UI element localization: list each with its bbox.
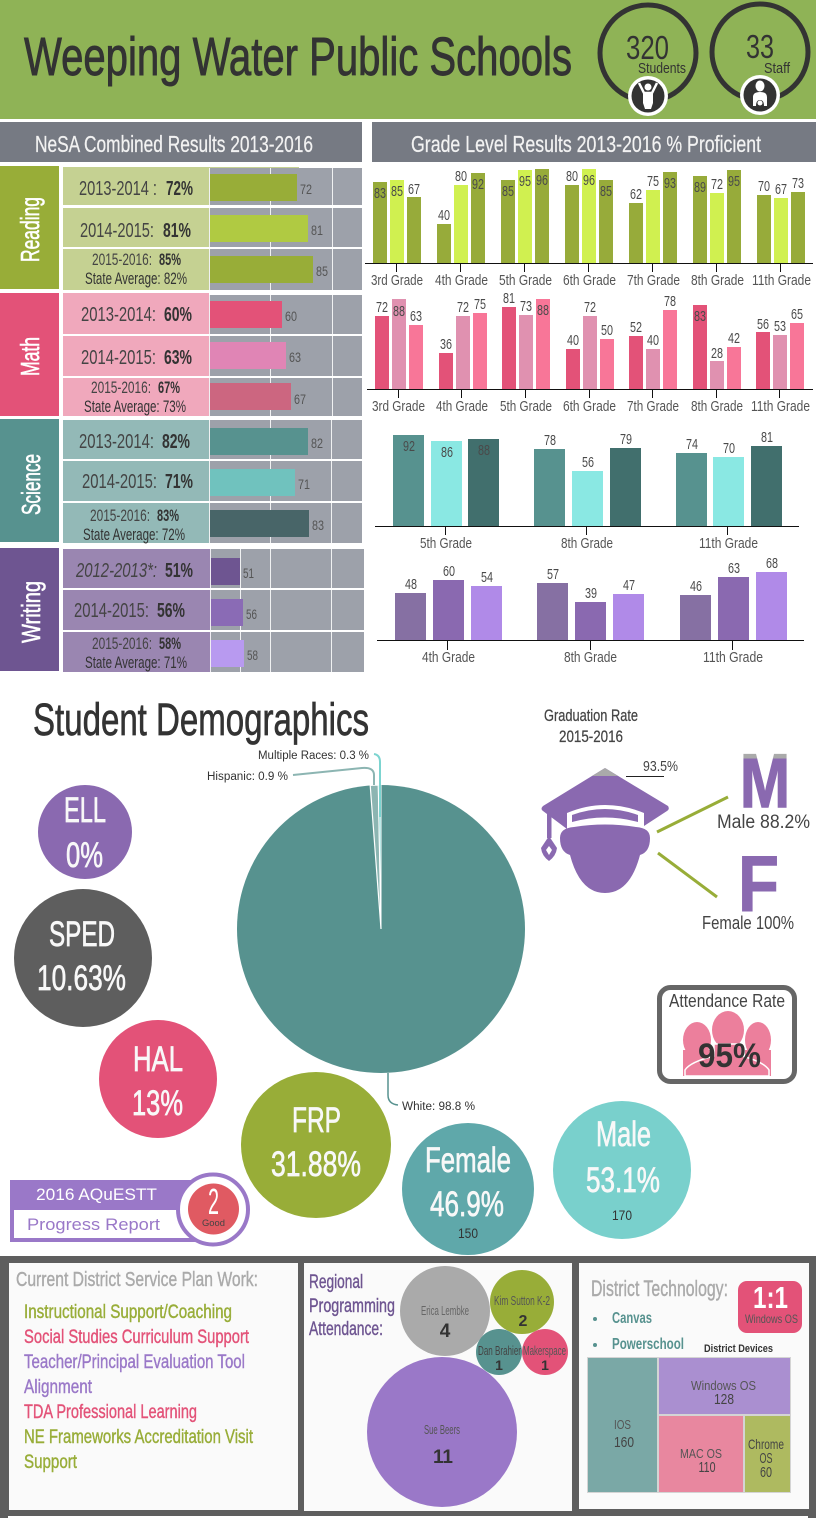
bar chart: reading by grade: 6th Grade (563, 273, 616, 289)
panel: service plan work: Alignment (24, 1377, 93, 1398)
bar chart: writing by grade: 68 (766, 556, 778, 572)
panel: service plan work: NE Frameworks Accreditation Visit (24, 1427, 254, 1448)
bar chart: reading by grade: 8th Grade (691, 273, 744, 289)
panel: science combined results: 2014-2015: (82, 471, 157, 493)
bar chart: writing by grade: 54 (481, 570, 493, 586)
panel: science combined results: 71 (298, 477, 310, 492)
bar chart: math by grade: 72 (584, 300, 596, 316)
bar chart: math by grade: 50 (601, 323, 613, 339)
panel: service plan work (9, 1263, 298, 1510)
treemap: district devices: 60 (760, 1464, 772, 1481)
stat circle: female: Female (425, 1141, 511, 1180)
bar chart: reading by grade: 7th Grade (627, 273, 680, 289)
stat circle: SPED: 10.63% (37, 959, 126, 998)
panel: writing combined results: 51 (243, 566, 254, 581)
panel: service plan work: Current District Service Plan Work: (16, 1269, 258, 1291)
bar chart: writing by grade: 11th Grade (703, 650, 763, 666)
panel: writing combined results: 58% (159, 635, 181, 653)
bubble: Dan Brahier (476, 1329, 522, 1375)
bar chart: science by grade: 88 (478, 443, 490, 459)
bar chart: writing by grade: 39 (585, 586, 597, 602)
bar chart: science by grade: 74 (686, 437, 698, 453)
panel: regional programming attendance: Attendance: (309, 1319, 383, 1340)
pie chart: race demographics: Multiple Races: 0.3 % (258, 750, 369, 762)
bubble: Dan Brahier: Dan Brahier (478, 1343, 521, 1358)
bubble: Erica Lembke: Erica Lembke (421, 1303, 469, 1318)
icon: adult and child (740, 75, 780, 115)
panel: writing combined results: 2015-2016: (92, 635, 152, 653)
panel: writing combined results (0, 548, 364, 672)
bar chart: writing by grade: 4th Grade (422, 650, 475, 666)
bar chart: reading by grade: 80 (455, 169, 467, 185)
bar chart: math by grade: 28 (711, 346, 723, 362)
bar chart: science by grade: 81 (761, 430, 773, 446)
bar chart: math by grade: 73 (520, 299, 532, 315)
heading: NeSA combined results (0, 122, 362, 162)
attendance rate box: Attendance Rate (669, 991, 785, 1011)
panel: math combined results: 2013-2014: (81, 304, 156, 326)
bar chart: math by grade: 52 (630, 320, 642, 336)
bar chart: writing by grade: 8th Grade (564, 650, 617, 666)
bubble: Erica Lembke: 4 (440, 1321, 451, 1342)
badge: 1:1 Windows OS (738, 1280, 802, 1333)
bar chart: writing by grade: 46 (690, 579, 702, 595)
panel: math combined results: 2014-2015: (81, 347, 156, 369)
panel: reading combined results: 72% (166, 178, 193, 200)
bar chart: reading by grade: 62 (630, 187, 642, 203)
bar chart: reading by grade: 3rd Grade (371, 273, 423, 289)
bar chart: math by grade: 88 (537, 303, 549, 319)
bar chart: science by grade (375, 430, 799, 552)
bar chart: math by grade: 42 (728, 331, 740, 347)
bar chart: writing by grade (377, 556, 804, 666)
title: Weeping Water Public Schools (24, 27, 572, 87)
bar chart: math by grade: 36 (440, 337, 452, 353)
graduation rate block: 93.5% (643, 758, 678, 775)
panel: science combined results: 83% (157, 507, 179, 525)
panel: reading combined results: 72 (300, 182, 312, 197)
panel: writing combined results: 56 (246, 607, 257, 622)
bar chart: math by grade: 8th Grade (691, 399, 743, 415)
bar chart: math by grade: 7th Grade (627, 399, 679, 415)
treemap: district devices: MAC OS (680, 1446, 722, 1461)
badge: AQuESTT progress report: Good (202, 1218, 225, 1228)
panel: reading combined results: 85% (159, 251, 181, 269)
panel: service plan work: TDA Professional Learning (24, 1402, 197, 1423)
treemap: district devices: 160 (614, 1434, 634, 1451)
bar chart: science by grade: 70 (723, 441, 735, 457)
panel: writing combined results: Writing (16, 581, 46, 643)
panel: science combined results: 2013-2014: (79, 431, 154, 453)
bubble: Erica Lembke (400, 1266, 490, 1356)
treemap: district devices: District Devices (704, 1343, 773, 1355)
panel: regional programming attendance: Programming (309, 1296, 395, 1317)
heading: student demographics: Student Demographics (33, 694, 369, 745)
panel: science combined results: 71% (165, 471, 193, 493)
stat circle: FRP (241, 1072, 391, 1218)
stat circle: female: 150 (458, 1225, 478, 1241)
male graduation rate: Male 88.2% (717, 812, 810, 833)
panel: science combined results (0, 419, 362, 544)
treemap: district devices: 110 (698, 1459, 716, 1476)
stat circle: male: 170 (612, 1207, 632, 1223)
panel: writing combined results: 2014-2015: (74, 600, 149, 622)
bar chart: math by grade: 72 (376, 300, 388, 316)
panel: writing combined results: State Average: 71% (85, 654, 187, 672)
bar chart: science by grade: 78 (544, 433, 556, 449)
bar chart: science by grade: 79 (620, 432, 632, 448)
bar chart: science by grade: 8th Grade (561, 536, 613, 552)
bar chart: reading by grade: 83 (374, 186, 386, 202)
bar chart: reading by grade: 89 (694, 180, 706, 196)
panel: regional programming attendance (304, 1263, 572, 1511)
bar chart: reading by grade: 96 (583, 173, 595, 189)
panel: math combined results (0, 293, 362, 416)
badge: AQuESTT progress report: Progress Report (27, 1215, 160, 1234)
badge: AQuESTT progress report: 2 (208, 1181, 219, 1222)
bubble: Kim Sutton (490, 1270, 554, 1334)
stat circle: SPED (14, 889, 152, 1027)
stat circle: male (553, 1101, 691, 1239)
bar chart: reading by grade: 85 (502, 184, 514, 200)
bar chart: reading by grade: 72 (711, 177, 723, 193)
bar chart: math by grade (367, 291, 813, 415)
panel: math combined results: 2015-2016: (91, 379, 151, 397)
bubble: Dan Brahier: 1 (495, 1357, 503, 1373)
students counter: Students (638, 60, 686, 77)
stat circle: HAL: 13% (132, 1084, 183, 1123)
icon: graduate with cap (541, 768, 669, 893)
bar chart: science by grade: 56 (582, 455, 594, 471)
bar chart: reading by grade: 73 (792, 176, 804, 192)
panel: math combined results: 60% (164, 304, 192, 326)
stat circle: ELL (38, 785, 132, 879)
bar chart: math by grade: 4th Grade (436, 399, 488, 415)
panel: service plan work: Social Studies Curriculum Support (24, 1327, 250, 1348)
pie chart: race demographics (207, 750, 525, 1113)
bar chart: math by grade: 63 (410, 309, 422, 325)
stat circle: ELL: 0% (66, 836, 103, 875)
attendance rate box: 95% (698, 1037, 761, 1075)
treemap: district devices: OS (760, 1450, 772, 1467)
panel: writing combined results: 51% (165, 560, 193, 582)
stat circle: FRP: 31.88% (271, 1145, 361, 1184)
panel: reading combined results: 2014-2015: (80, 220, 154, 242)
bar chart: reading by grade: 85 (391, 184, 403, 200)
bubble: Makerspace: Makerspace (523, 1343, 566, 1358)
stat circle: male: 53.1% (586, 1161, 660, 1200)
bubble: Sue Beers: Sue Beers (424, 1422, 460, 1437)
bar chart: reading by grade: 93 (664, 176, 676, 192)
bar chart: writing by grade: 60 (443, 564, 455, 580)
panel: writing combined results: 2012-2013*: (75, 560, 157, 582)
bubble: Makerspace (522, 1329, 568, 1375)
bar chart: writing by grade: 47 (623, 578, 635, 594)
bar chart: reading by grade: 85 (600, 184, 612, 200)
bar chart: reading by grade: 80 (566, 169, 578, 185)
treemap: district devices (587, 1343, 791, 1493)
pie chart: race demographics: Hispanic: 0.9 % (207, 771, 288, 783)
panel: reading combined results: 81% (163, 220, 191, 242)
bar chart: reading by grade: 4th Grade (435, 273, 488, 289)
bubble: Makerspace: 1 (541, 1357, 549, 1373)
bar chart: math by grade: 3rd Grade (372, 399, 425, 415)
treemap: district devices: Chrome (748, 1436, 784, 1452)
panel: math combined results: 67% (158, 379, 180, 397)
graduation rate block: Graduation Rate (544, 706, 638, 725)
panel: district technology: District Technology: (591, 1276, 728, 1301)
staff counter (712, 4, 808, 115)
panel: reading combined results: 85 (316, 264, 328, 279)
bar chart: reading by grade: 40 (438, 208, 450, 224)
panel: science combined results: 82 (311, 436, 323, 451)
bar chart: writing by grade: 48 (405, 577, 417, 593)
list: technology platforms: Powerschool (612, 1336, 684, 1353)
panel: reading combined results: 2013-2014 : (79, 178, 157, 200)
bar chart: reading by grade: 95 (728, 174, 740, 190)
students counter (600, 5, 696, 116)
panel: science combined results: 2015-2016: (90, 507, 150, 525)
list: technology platforms: Canvas (612, 1310, 652, 1327)
bar chart: science by grade: 11th Grade (699, 536, 758, 552)
students counter: 320 (626, 29, 669, 66)
bar chart: math by grade: 81 (503, 291, 515, 307)
bar chart: math by grade: 72 (457, 300, 469, 316)
panel: math combined results: State Average: 73% (84, 398, 186, 416)
panel: reading combined results: 2015-2016: (92, 251, 152, 269)
footer band (0, 1256, 816, 1518)
panel: math combined results: 60 (285, 309, 297, 324)
treemap: district devices: IOS (614, 1417, 631, 1432)
panel: district technology (579, 1263, 809, 1509)
stat circle: male: Male (596, 1115, 651, 1154)
bar chart: math by grade: 83 (694, 309, 706, 325)
bar chart: math by grade: 88 (393, 304, 405, 320)
bubble: Kim Sutton: 2 (519, 1313, 528, 1330)
panel: math combined results: 67 (294, 392, 306, 407)
staff counter: Staff (764, 60, 791, 77)
bar chart: math by grade: 6th Grade (563, 399, 616, 415)
panel: reading combined results: Reading (15, 197, 45, 262)
bar chart: math by grade: 40 (647, 333, 659, 349)
female graduation rate: Female 100% (702, 913, 794, 933)
bubble: Sue Beers (367, 1357, 517, 1507)
pie chart: race demographics: White: 98.8 % (402, 1101, 475, 1113)
bar chart: math by grade: 65 (791, 307, 803, 323)
bar chart: math by grade: 75 (474, 297, 486, 313)
panel: science combined results: Science (16, 454, 46, 515)
bar chart: math by grade: 5th Grade (500, 399, 552, 415)
bar chart: writing by grade: 57 (547, 567, 559, 583)
stat circle: SPED: SPED (49, 915, 115, 954)
bar chart: reading by grade (365, 169, 813, 289)
staff counter: 33 (746, 28, 774, 65)
badge: AQuESTT progress report (10, 1174, 248, 1244)
panel: service plan work: Support (24, 1452, 78, 1473)
bar chart: reading by grade: 70 (758, 179, 770, 195)
treemap: district devices: 128 (714, 1391, 734, 1408)
badge: 1:1 Windows OS: Windows OS (745, 1312, 798, 1326)
panel: math combined results: Math (15, 337, 45, 376)
panel: service plan work: Instructional Support/Coaching (24, 1302, 232, 1323)
panel: science combined results: 82% (162, 431, 190, 453)
stat circle: female (402, 1123, 534, 1255)
graduation rate block (541, 706, 810, 933)
graduation rate block: 2015-2016 (559, 727, 623, 746)
panel: reading combined results (0, 166, 362, 290)
stat circle: HAL: HAL (133, 1040, 183, 1079)
badge: 1:1 Windows OS: 1:1 (753, 1280, 788, 1315)
header banner (0, 0, 816, 119)
heading: NeSA combined results: NeSA Combined Results 2013-2016 (35, 131, 313, 157)
panel: reading combined results: 81 (311, 223, 323, 238)
stat circle: ELL: ELL (64, 791, 106, 830)
bubble: Sue Beers: 11 (433, 1447, 453, 1468)
bar chart: reading by grade: 5th Grade (499, 273, 552, 289)
bar chart: science by grade: 5th Grade (420, 536, 472, 552)
icon: child with raised arms (628, 76, 668, 116)
bar chart: reading by grade: 95 (519, 174, 531, 190)
bar chart: math by grade: 56 (757, 317, 769, 333)
bar chart: reading by grade: 67 (775, 182, 787, 198)
bar chart: science by grade: 86 (441, 445, 453, 461)
bubble: Kim Sutton: Kim Sutton K-2 (494, 1293, 550, 1308)
attendance rate box (660, 988, 794, 1082)
bar chart: reading by grade: 67 (408, 182, 420, 198)
bar chart: reading by grade: 75 (647, 174, 659, 190)
male graduation rate (717, 739, 810, 833)
badge: AQuESTT progress report: 2016 AQuESTT (36, 1185, 157, 1204)
female graduation rate: F (738, 839, 779, 928)
bar chart: math by grade: 53 (774, 319, 786, 335)
bar chart: math by grade: 78 (664, 294, 676, 310)
list: technology platforms (593, 1310, 684, 1353)
male graduation rate: M (740, 739, 790, 824)
treemap: district devices: Windows OS (691, 1378, 756, 1393)
bar chart: math by grade: 40 (567, 333, 579, 349)
heading: grade level results (372, 122, 816, 162)
panel: reading combined results: State Average: 82% (85, 270, 187, 288)
bar chart: science by grade: 92 (403, 439, 415, 455)
icon: three people (683, 1011, 771, 1076)
panel: writing combined results: 58 (247, 648, 258, 663)
panel: service plan work: Teacher/Principal Evaluation Tool (24, 1352, 245, 1373)
panel: writing combined results: 56% (157, 600, 185, 622)
stat circle: FRP: FRP (292, 1101, 341, 1140)
bar chart: reading by grade: 92 (472, 177, 484, 193)
stat circle: HAL (99, 1020, 217, 1138)
female graduation rate (702, 839, 794, 933)
bar chart: writing by grade: 63 (728, 561, 740, 577)
panel: regional programming attendance: Regional (309, 1272, 363, 1293)
panel: math combined results: 63 (289, 350, 301, 365)
bar chart: reading by grade: 96 (536, 173, 548, 189)
panel: science combined results: 83 (312, 518, 324, 533)
panel: math combined results: 63% (164, 347, 192, 369)
stat circle: female: 46.9% (430, 1185, 504, 1224)
panel: science combined results: State Average: 72% (83, 526, 185, 544)
